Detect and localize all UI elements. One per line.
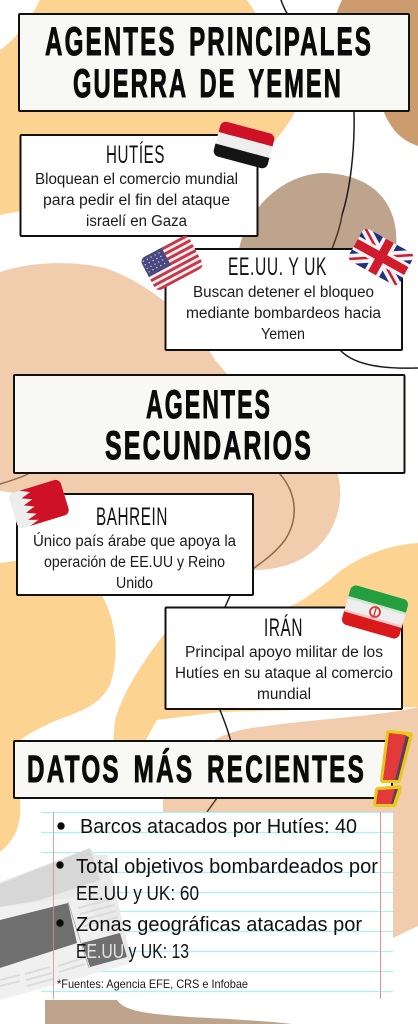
data item: objetivos bombardeados: EE.UU y UK: 60 [76, 883, 199, 905]
panel: Irán [166, 608, 402, 709]
panel: Bahrein: Único país árabe que apoya la [33, 533, 236, 550]
data item: zonas geográficas [56, 914, 362, 963]
panel: EE.UU. y UK: Buscan detener el bloqueo [193, 284, 374, 301]
data item: barcos atacados: Barcos atacados por Hutíes: 40 [80, 816, 357, 838]
data item: objetivos bombardeados [56, 856, 378, 905]
icon: exclamation mark [376, 733, 410, 804]
panel: Irán: IRÁN [264, 613, 303, 642]
icon: Iran flag [341, 584, 409, 640]
panel: Hutíes: israelí en Gaza [86, 213, 187, 230]
data item: zonas geográficas: Zonas geográficas atacadas por [76, 914, 362, 936]
panel: EE.UU. y UK: EE.UU. Y UK [228, 253, 327, 281]
panel: Irán: Hutíes en su ataque al comercio [175, 665, 393, 682]
notebook paper panel [41, 812, 393, 999]
sources note: *Fuentes: Agencia EFE, CRS e Infobae [57, 977, 248, 991]
heading panel: agentes secundarios: AGENTES [146, 383, 272, 427]
panel: Hutíes: Bloquean el comercio mundial [35, 171, 238, 188]
icon: UK flag [348, 228, 414, 286]
icon: Yemen flag [212, 120, 276, 170]
panel: Bahrein: Unido [116, 575, 153, 592]
panel: Bahrein [17, 494, 253, 595]
data item: zonas geográficas: EE.UU y UK: 13 [76, 941, 189, 963]
data list [56, 816, 378, 991]
panel: Hutíes: HUTÍES [106, 140, 165, 169]
data item: objetivos bombardeados: Total objetivos bombardeados por [76, 856, 378, 878]
panel: Hutíes [20, 135, 258, 236]
icon: USA flag [142, 236, 202, 290]
panel: EE.UU. y UK [166, 249, 402, 350]
panel: EE.UU. y UK: mediante bombardeos hacia [186, 305, 381, 322]
heading panel: datos más recientes [14, 741, 392, 798]
panel: EE.UU. y UK: Yemen [261, 326, 305, 343]
panel: Hutíes: para pedir el fin del ataque [43, 192, 230, 209]
panel: Irán: mundial [257, 686, 311, 703]
connecting curved line [0, 0, 418, 812]
panel: Bahrein: BAHREIN [96, 503, 168, 531]
heading panel: agentes secundarios [14, 375, 404, 473]
left notebook margin line [52, 812, 54, 999]
panel: Irán: Principal apoyo militar de los [185, 644, 383, 661]
title panel [19, 14, 409, 111]
panel: Bahrein: operación de EE.UU y Reino [44, 554, 225, 571]
icon: Bahrain flag [8, 478, 70, 530]
icon: newspaper [0, 848, 132, 1000]
